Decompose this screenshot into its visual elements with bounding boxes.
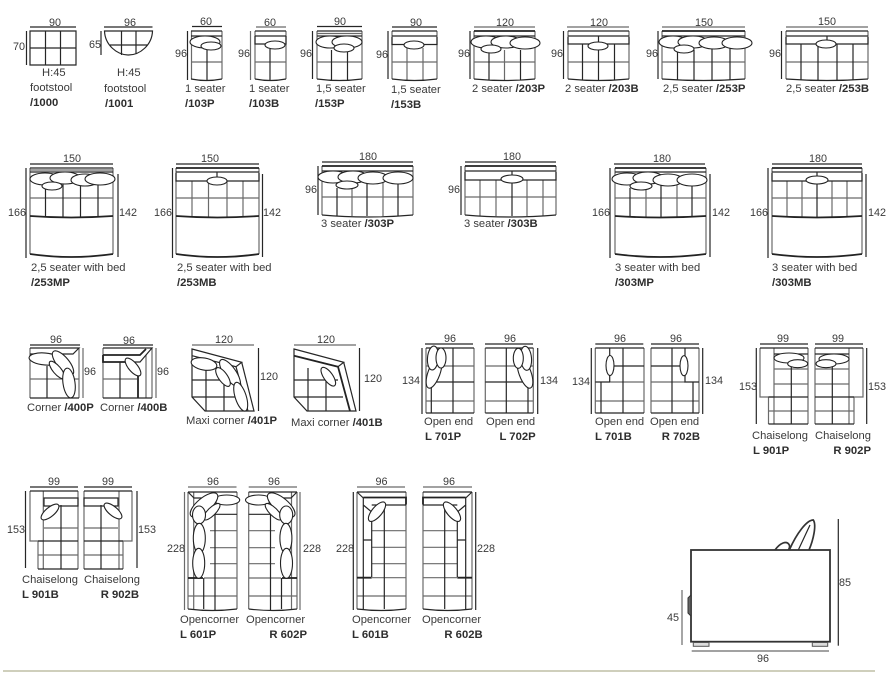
module: chaiselong R 902P <box>815 333 886 457</box>
dimensions: 134 <box>705 375 723 387</box>
plan drawing <box>30 168 115 257</box>
module: maxi corner 401B <box>291 334 383 429</box>
module: 3 seater with bed 303MP <box>592 153 730 289</box>
module: open end L 701P <box>402 333 474 443</box>
plan drawing <box>786 31 868 80</box>
module: open end L 702P: L 702P <box>499 431 536 443</box>
dimensions <box>646 17 745 79</box>
dimensions <box>376 17 437 79</box>
module: opencorner R 602P: R 602P <box>269 629 307 641</box>
dimensions: 153 <box>868 381 886 393</box>
module: 3 seater 303B <box>448 151 556 230</box>
dimensions: 96 <box>300 48 312 60</box>
dimensions: 180 <box>359 151 377 163</box>
module: chaiselong R 902B: R 902B <box>101 589 139 601</box>
plan drawing <box>595 348 644 413</box>
dimensions: 228 <box>303 543 321 555</box>
module: 3 seater with bed 303MB: /303MB <box>772 277 812 289</box>
label: 3 seater with bed <box>615 262 700 274</box>
feet <box>693 642 828 646</box>
label: 1,5 seater <box>316 83 366 95</box>
dimensions: 120 <box>260 371 278 383</box>
dimensions <box>8 153 137 258</box>
module: opencorner L 601P <box>167 476 240 641</box>
dimensions <box>402 333 473 414</box>
dimensions: 142 <box>868 207 886 219</box>
label: Opencorner <box>180 614 239 626</box>
plan drawing <box>568 31 629 80</box>
dimensions: 150 <box>695 17 713 29</box>
dimensions: 99 <box>48 476 60 488</box>
dimensions: 96 <box>614 333 626 345</box>
plan drawing <box>485 346 536 413</box>
module: opencorner R 602B: R 602B <box>444 629 483 641</box>
dimensions: 134 <box>402 375 420 387</box>
dimensions: 96 <box>458 48 470 60</box>
dimensions: 142 <box>263 207 281 219</box>
dimensions <box>84 476 156 568</box>
dimensions: 96 <box>769 48 781 60</box>
label: 2,5 seater with bed <box>177 262 272 274</box>
dimensions: 99 <box>832 333 844 345</box>
label: Chaiselong <box>22 574 78 586</box>
module: 1 seater 103B: /103B <box>249 98 279 110</box>
dimensions <box>89 17 152 55</box>
dimensions: 96 <box>123 335 135 347</box>
plan drawing <box>294 349 356 411</box>
dimensions <box>175 16 222 80</box>
plan drawing <box>392 31 437 80</box>
dimensions <box>572 333 643 414</box>
module: 1,5 seater 153B: /153B <box>391 99 421 111</box>
module: footstool 1000 <box>13 17 76 109</box>
dimensions: 96 <box>50 334 62 346</box>
dimensions: 150 <box>201 153 219 165</box>
dimensions <box>7 476 78 568</box>
dimensions <box>739 333 808 424</box>
dimensions <box>769 16 868 79</box>
dimensions: 120 <box>317 334 335 346</box>
bottom rule <box>3 670 875 672</box>
module: 2,5 seater with bed 253MB <box>154 153 281 289</box>
dimensions: 228 <box>477 543 495 555</box>
dimensions: 166 <box>8 207 26 219</box>
label: 2,5 seater /253P <box>663 83 746 95</box>
module: 2,5 seater 253P <box>646 17 752 95</box>
dimensions: 96 <box>376 476 388 488</box>
dimensions: 96 <box>444 333 456 345</box>
module: maxi corner 401P <box>186 334 278 427</box>
module: 2 seater 203P <box>458 17 546 95</box>
module: 3 seater 303P <box>305 151 413 230</box>
dimensions <box>13 17 76 65</box>
dimensions: 65 <box>89 39 101 51</box>
dimensions: 96 <box>124 17 136 29</box>
module: 2,5 seater with bed 253MP: /253MP <box>31 277 70 289</box>
dimensions: 96 <box>551 48 563 60</box>
module: 2,5 seater with bed 253MB: /253MB <box>177 277 217 289</box>
dimensions: 99 <box>777 333 789 345</box>
dimensions <box>651 333 723 414</box>
dimensions: 96 <box>238 48 250 60</box>
module: 1,5 seater 153P: /153P <box>315 98 345 110</box>
module: 1 seater 103P <box>175 16 226 110</box>
label: Open end <box>650 416 699 428</box>
dimensions <box>592 153 730 258</box>
module: footstool 1001: /1001 <box>105 98 133 110</box>
dimensions: 96 <box>646 48 658 60</box>
plan drawing <box>760 348 808 424</box>
dimensions: 150 <box>63 153 81 165</box>
dimensions: 96 <box>448 184 460 196</box>
side elevation drawing <box>667 519 851 665</box>
module: chaiselong R 902P: R 902P <box>833 445 871 457</box>
dimensions <box>294 334 382 411</box>
dimensions: 120 <box>496 17 514 29</box>
dimensions: 228 <box>167 543 185 555</box>
label: 2 seater /203P <box>472 83 546 95</box>
seat height 45 dimension <box>667 590 682 645</box>
dimensions: 142 <box>119 207 137 219</box>
label: 1 seater <box>249 83 290 95</box>
dimensions: 142 <box>712 207 730 219</box>
dimensions <box>485 333 558 414</box>
dimensions: 99 <box>102 476 114 488</box>
plan drawing <box>815 348 863 424</box>
dimensions: 96 <box>207 476 219 488</box>
module: 3 seater with bed 303MP: /303MP <box>615 277 654 289</box>
module: chaiselong L 901P: L 901P <box>753 445 790 457</box>
dimensions: 228 <box>336 543 354 555</box>
plan drawing <box>659 31 752 80</box>
label: Chaiselong <box>84 574 140 586</box>
dimensions: 153 <box>739 381 757 393</box>
plan drawing <box>190 349 254 413</box>
plan drawing <box>103 348 152 398</box>
dimensions: 153 <box>138 524 156 536</box>
dimensions: 70 <box>13 41 25 53</box>
module: footstool 1000: footstool <box>30 82 72 94</box>
module: opencorner L 601P: L 601P <box>180 629 217 641</box>
label: Maxi corner /401B <box>291 417 383 429</box>
dimensions: 90 <box>334 16 346 28</box>
dimensions <box>448 151 556 215</box>
plan drawing <box>316 31 362 80</box>
dimensions <box>750 153 886 258</box>
label: Opencorner <box>352 614 411 626</box>
label: 3 seater with bed <box>772 262 857 274</box>
dimensions <box>458 17 535 79</box>
dimensions: 60 <box>200 16 212 28</box>
label: H:45 <box>42 67 66 79</box>
dimensions: 96 <box>84 366 96 378</box>
module: corner 400B <box>100 335 169 414</box>
plan drawing <box>255 31 286 80</box>
plan drawing <box>651 348 699 413</box>
dimensions <box>238 17 286 80</box>
dimensions: 134 <box>540 375 558 387</box>
dimensions: 180 <box>653 153 671 165</box>
dimensions: 134 <box>572 376 590 388</box>
dimensions: 96 <box>376 49 388 61</box>
height 85 dimension: 85 <box>839 577 851 589</box>
plan drawing <box>84 491 132 569</box>
armrest handle <box>688 595 691 616</box>
module: 1,5 seater 153B <box>376 17 441 111</box>
module: 1 seater 103B <box>238 17 290 110</box>
dimensions <box>300 16 362 79</box>
height 85 dimension <box>838 519 851 646</box>
module: 2,5 seater with bed 253MP <box>8 153 137 289</box>
plan drawing <box>772 168 862 257</box>
cushion silhouettes <box>775 520 815 550</box>
label: 3 seater /303B <box>464 218 538 230</box>
dimensions <box>336 476 405 610</box>
plan drawing <box>190 31 222 80</box>
label: 3 seater /303P <box>321 218 395 230</box>
module: 2 seater 203B <box>551 17 639 95</box>
label: Chaiselong <box>752 430 808 442</box>
module: opencorner R 602B <box>422 476 495 641</box>
plan drawing <box>465 166 556 217</box>
label: Open end <box>486 416 535 428</box>
label: 1 seater <box>185 83 226 95</box>
dimensions: 90 <box>410 17 422 29</box>
dimensions: 180 <box>503 151 521 163</box>
dimensions <box>192 334 278 411</box>
sofa body <box>691 550 830 642</box>
label: Opencorner <box>422 614 481 626</box>
depth 96 dimension <box>692 651 829 665</box>
plan drawing <box>30 491 78 569</box>
module: chaiselong L 901P <box>739 333 808 457</box>
seat height 45 dimension: 45 <box>667 612 679 624</box>
dimensions <box>103 335 169 398</box>
dimensions <box>423 476 495 610</box>
label: H:45 <box>117 67 141 79</box>
plan drawing <box>357 492 406 610</box>
dimensions: 153 <box>7 524 25 536</box>
module: footstool 1001: footstool <box>104 83 146 95</box>
plan drawing <box>186 489 240 610</box>
dimensions: 96 <box>443 476 455 488</box>
module: 3 seater with bed 303MB <box>750 153 886 289</box>
module: open end L 701P: L 701P <box>425 431 462 443</box>
module: 1,5 seater 153P <box>300 16 366 110</box>
label: Chaiselong <box>815 430 871 442</box>
plan drawing <box>30 31 76 65</box>
module: chaiselong L 901B: L 901B <box>22 589 59 601</box>
dimensions: 166 <box>592 207 610 219</box>
dimensions: 166 <box>154 207 172 219</box>
module: open end L 702P <box>485 333 558 443</box>
dimensions: 60 <box>264 17 276 29</box>
plan drawing <box>423 492 472 610</box>
dimensions: 96 <box>305 184 317 196</box>
dimensions: 166 <box>750 207 768 219</box>
dimensions <box>551 17 629 79</box>
depth 96 dimension: 96 <box>757 653 769 665</box>
module: opencorner R 602P <box>246 476 321 641</box>
module: corner 400P <box>27 334 96 414</box>
label: Maxi corner /401P <box>186 415 278 427</box>
module: open end R 702B <box>650 333 723 443</box>
dimensions: 120 <box>215 334 233 346</box>
dimensions: 120 <box>590 17 608 29</box>
module: chaiselong R 902B <box>84 476 156 601</box>
module: opencorner L 601B: L 601B <box>352 629 389 641</box>
dimensions <box>305 151 413 215</box>
dimensions: 150 <box>818 16 836 28</box>
module: footstool 1001 <box>89 17 152 110</box>
dimensions <box>249 476 321 610</box>
plan drawing <box>318 166 413 217</box>
plan drawing <box>612 168 707 257</box>
module: 2,5 seater 253B <box>769 16 869 95</box>
dimensions <box>154 153 281 258</box>
dimensions: 96 <box>157 366 169 378</box>
label: Opencorner <box>246 614 305 626</box>
dimensions: 96 <box>504 333 516 345</box>
module: open end L 701B <box>572 333 644 443</box>
label: Open end <box>595 416 644 428</box>
dimensions: 96 <box>175 48 187 60</box>
module: chaiselong L 901B <box>7 476 78 601</box>
plan drawing <box>176 168 259 257</box>
plan drawing <box>471 31 540 80</box>
label: 2,5 seater /253B <box>786 83 869 95</box>
module: opencorner L 601B <box>336 476 411 641</box>
dimensions: 96 <box>268 476 280 488</box>
plan drawing <box>29 348 79 399</box>
dimensions: 120 <box>364 373 382 385</box>
module: open end R 702B: R 702B <box>662 431 700 443</box>
plan drawing <box>104 31 152 55</box>
dimensions: 180 <box>809 153 827 165</box>
dimensions <box>30 334 96 398</box>
dimensions: 96 <box>670 333 682 345</box>
label: Corner /400P <box>27 402 94 414</box>
label: Corner /400B <box>100 402 167 414</box>
dimensions <box>815 333 886 424</box>
label: 1,5 seater <box>391 84 441 96</box>
plan drawing <box>246 489 299 610</box>
dimensions: 90 <box>49 17 61 29</box>
module: 1 seater 103P: /103P <box>185 98 215 110</box>
label: Open end <box>424 416 473 428</box>
dimensions <box>167 476 236 610</box>
module: open end L 701B: L 701B <box>595 431 632 443</box>
plan drawing <box>423 346 474 413</box>
label: 2 seater /203B <box>565 83 639 95</box>
module: footstool 1000: /1000 <box>30 97 58 109</box>
label: 2,5 seater with bed <box>31 262 126 274</box>
